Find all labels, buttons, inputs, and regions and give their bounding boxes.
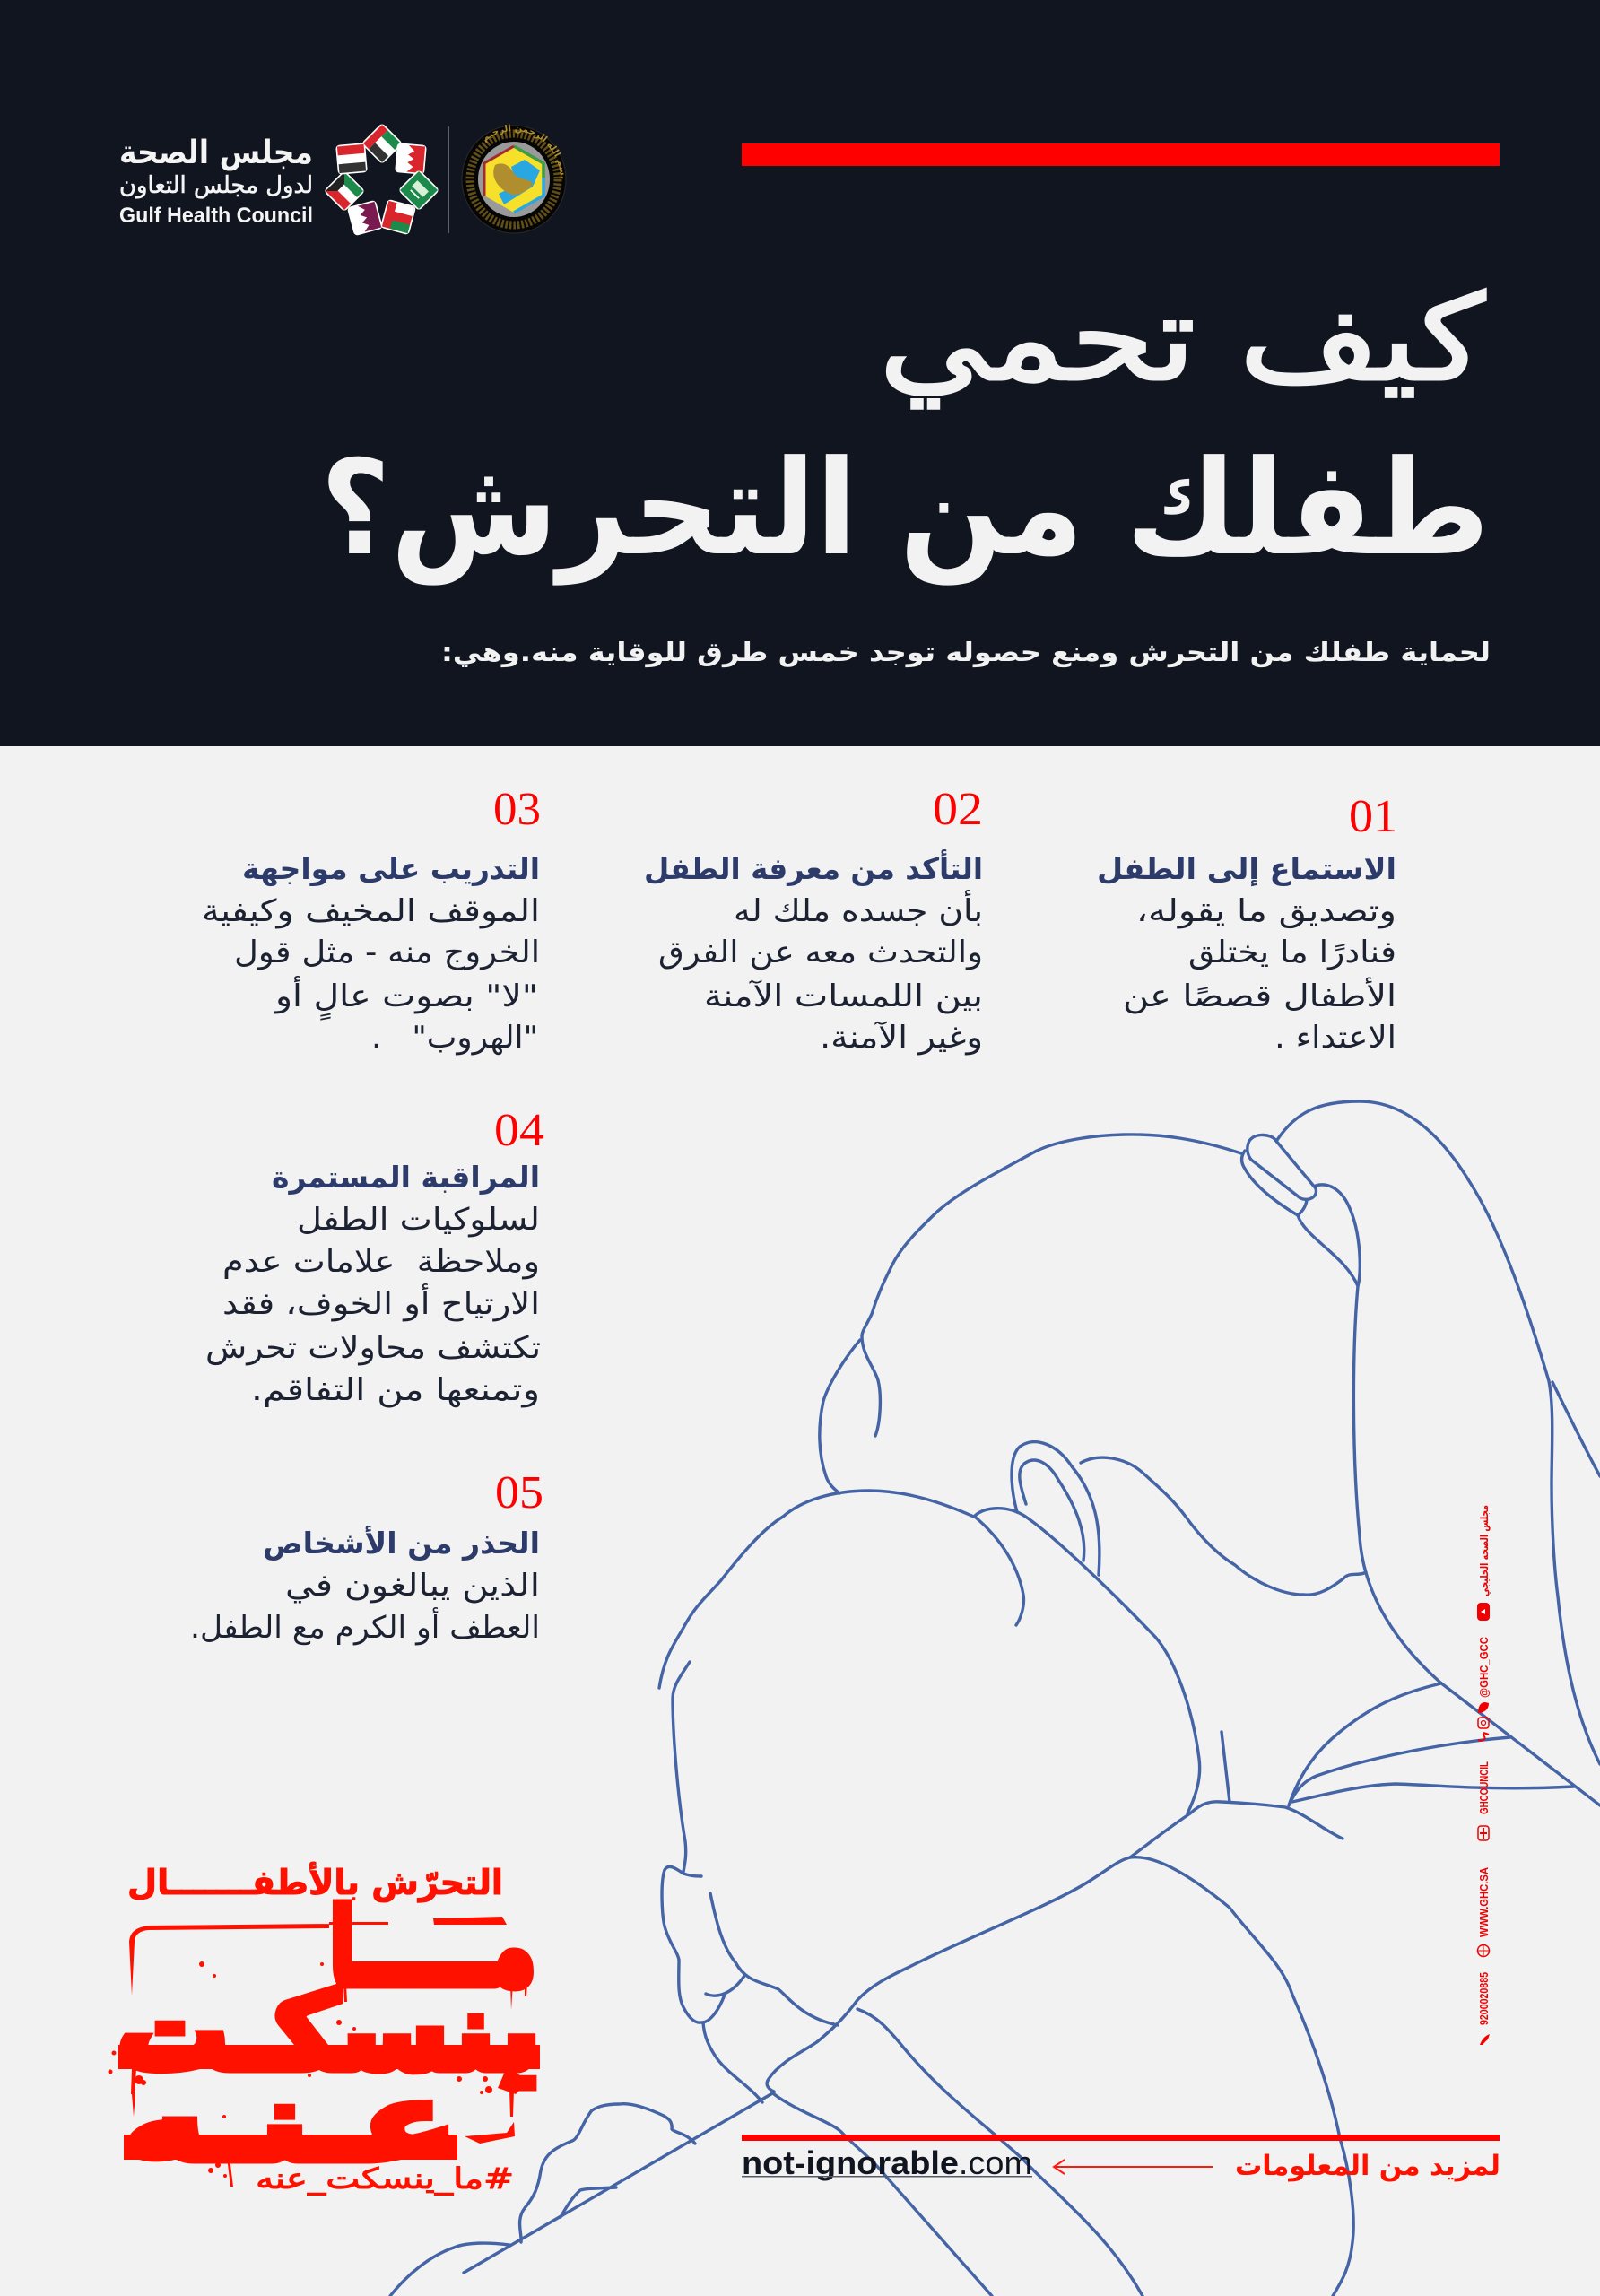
campaign logo: child harassment, not to be silenced: التحرّش بالأطفـــــــال	[127, 1861, 503, 1902]
illustration: mother holding child line art	[390, 1101, 1600, 2296]
tip 03: التدريب على مواجهة	[242, 851, 540, 887]
tip 04: الارتياح أو الخوف، فقد	[222, 1283, 540, 1322]
tip 04: تكتشف محاولات تحرش	[205, 1330, 541, 1366]
campaign logo: child harassment, not to be silenced: مـــــا	[329, 1886, 536, 2011]
tip 05: الذين يبالغون في	[285, 1568, 540, 1604]
vertical social contact strip	[1477, 1505, 1491, 2045]
tip 03: 03	[493, 784, 541, 835]
title	[320, 270, 1490, 586]
tip 05: العطف أو الكرم مع الطفل.	[190, 1607, 540, 1646]
vertical social contact strip: WWW.GHC.SA	[1477, 1866, 1491, 1937]
tip 04: المراقبة المستمرة	[272, 1160, 540, 1196]
tip 01: فنادرًا ما يختلق	[1188, 935, 1396, 970]
tip 04	[205, 1105, 544, 1408]
tip 02: والتحدث معه عن الفرق	[658, 935, 983, 970]
campaign logo: child harassment, not to be silenced: #ما_ينسكت_عنه	[256, 2161, 514, 2196]
bottom red rule	[742, 2135, 1500, 2141]
tip 03: الموقف المخيف وكيفية	[202, 893, 540, 929]
icon: seven flag star logo	[324, 123, 439, 236]
tip 01: 01	[1349, 791, 1397, 842]
vertical social contact strip: مجلس الصحة الخليجي	[1478, 1505, 1491, 1596]
tip 04: وتمنعها من التفاقم.	[251, 1372, 540, 1408]
tip 02: بين اللمسات الآمنة	[704, 978, 983, 1014]
vertical social contact strip: 9200020885	[1477, 1972, 1491, 2025]
tip 02: 02	[933, 784, 983, 835]
vertical social contact strip: @GHC_GCC	[1477, 1636, 1491, 1698]
Gulf Health Council logo wordmark: Gulf Health Council	[119, 204, 313, 228]
icon: GCC emblem	[461, 124, 567, 233]
tip 04: 04	[494, 1105, 544, 1156]
campaign logo: child harassment, not to be silenced: ينسكـت	[117, 1970, 541, 2095]
Gulf Health Council logo wordmark: مجلس الصحة	[119, 135, 313, 171]
tip 02	[644, 784, 983, 1056]
tip 03: الخروج منه - مثل قول	[234, 935, 540, 970]
tip 05: الحذر من الأشخاص	[263, 1525, 540, 1561]
tip 01: وتصديق ما يقوله،	[1136, 893, 1396, 929]
tip 03	[202, 784, 541, 1056]
call to action text: لمزيد من المعلومات	[1235, 2150, 1500, 2182]
tip 01: الأطفال قصصًا عن	[1123, 977, 1396, 1014]
tip 02: وغير الآمنة.	[820, 1020, 983, 1056]
tip 03: "لا" بصوت عالٍ أو	[274, 976, 538, 1021]
website link: not-ignorable .com	[742, 2144, 1032, 2181]
arrow	[1054, 2160, 1213, 2174]
campaign logo: child harassment, not to be silenced	[108, 1861, 541, 2196]
top red accent bar	[742, 144, 1500, 166]
tip 01: الاعتداء .	[1274, 1020, 1396, 1056]
vertical social contact strip: GHCOUNCIL	[1477, 1761, 1491, 1814]
Gulf Health Council logo wordmark	[119, 135, 313, 228]
tip 03: "الهروب" .	[371, 1020, 538, 1056]
logo divider	[448, 126, 449, 233]
tip 04: وملاحظة علامات عدم	[222, 1244, 540, 1280]
tip 01: الاستماع إلى الطفل	[1097, 851, 1396, 887]
title: كيف تحمي	[879, 270, 1485, 408]
title: طفلك من التحرش؟	[320, 432, 1490, 586]
header background panel	[0, 0, 1600, 746]
tip 05	[190, 1467, 543, 1646]
tip 02: التأكد من معرفة الطفل	[644, 849, 983, 887]
subtitle: لحماية طفلك من التحرش ومنع حصوله توجد خمس طرق للوقاية منه.وهي:	[441, 637, 1491, 667]
tip 02: بأن جسده ملك له	[734, 890, 983, 929]
tip 05: 05	[495, 1467, 543, 1518]
campaign logo: child harassment, not to be silenced: عـنـه	[123, 2061, 457, 2186]
Gulf Health Council logo wordmark: لدول مجلس التعاون	[119, 172, 313, 199]
icon: GCC emblem: بسم الله الرحمن الرحيم	[484, 124, 563, 179]
tip 04: لسلوكيات الطفل	[297, 1202, 540, 1238]
tip 01	[1097, 791, 1397, 1056]
